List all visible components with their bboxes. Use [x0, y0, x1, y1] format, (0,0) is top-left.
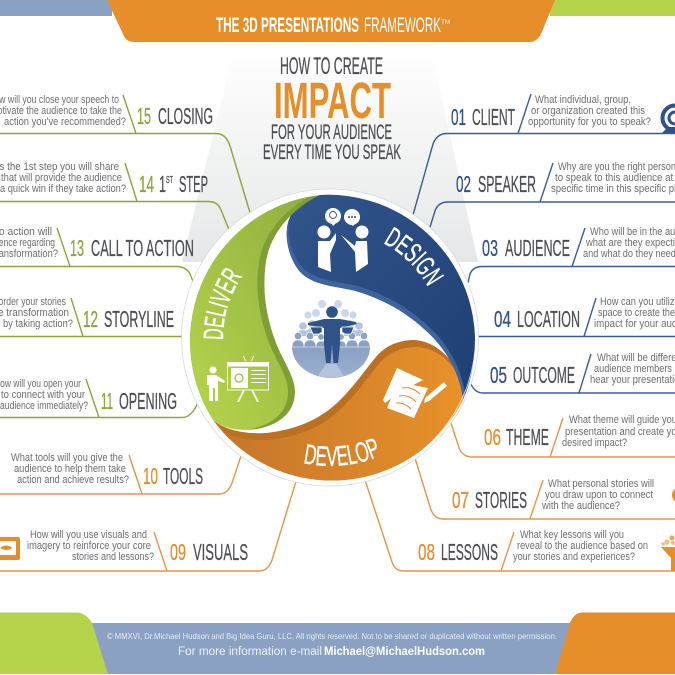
item 09 visuals: stories and lessons? — [72, 551, 154, 563]
item 14 first step: that will provide the audience — [1, 172, 122, 184]
item 01 client: CLIENT — [472, 104, 515, 130]
item 12 storyline: by taking action? — [3, 318, 73, 330]
rim highlight — [184, 192, 476, 483]
item 09 visuals: 09 — [170, 539, 186, 565]
item 10 tools — [0, 452, 242, 494]
icon: stories — [672, 487, 675, 503]
icon: funnel — [661, 535, 675, 571]
segment: develop — [213, 340, 466, 488]
icon: notes and pencil — [383, 368, 447, 418]
item 10 tools: 10 — [143, 463, 158, 489]
top right green band — [550, 0, 675, 16]
header banner — [107, 0, 555, 42]
item 01 client — [413, 94, 675, 215]
contact text: Michael@MichaelHudson.com — [324, 646, 485, 658]
item 12 storyline — [0, 296, 184, 336]
headline: EVERY TIME YOU SPEAK — [263, 140, 401, 164]
item 04 location — [477, 296, 675, 336]
label: deliver: DELIVER — [203, 268, 242, 339]
item 11 opening — [0, 378, 198, 418]
item 08 lessons: LESSONS — [441, 539, 498, 565]
item 13 call to action — [0, 226, 194, 284]
item 05 outcome — [471, 352, 675, 393]
item 03 audience — [468, 226, 675, 283]
item 07 stories — [415, 458, 675, 519]
item 01 client: 01 — [451, 104, 466, 130]
item 06 theme: desired impact? — [562, 437, 627, 449]
icon: presenter at board — [207, 356, 269, 402]
item 10 tools: TOOLS — [163, 463, 203, 489]
copyright text: © MMXVI, Dr.Michael Hudson and Big Idea Guru, LLC. All rights reserved. Not to be shared or duplicated without written permission. — [107, 631, 557, 641]
segment: design — [286, 190, 477, 400]
segment: deliver — [183, 195, 320, 430]
label: design: DESIGN — [384, 226, 444, 286]
item 10 tools: action and achieve results? — [17, 474, 129, 486]
item 08 lessons — [365, 480, 675, 571]
top left blue band — [0, 0, 112, 16]
headline — [263, 53, 401, 164]
item 02 speaker: 02 — [456, 171, 471, 197]
item 12 storyline: STORYLINE — [104, 306, 174, 332]
item 01 client: opportunity for you to speak? — [528, 116, 651, 128]
item 01 client: What individual, group, — [535, 94, 631, 106]
item 02 speaker: SPEAKER — [478, 171, 536, 197]
item 10 tools: What tools will you give the — [11, 452, 123, 464]
item 11 opening: 11 — [101, 388, 113, 414]
three part wheel — [181, 188, 479, 486]
banner title: FRAMEWORK — [364, 14, 441, 37]
footer green block — [0, 612, 108, 674]
item 08 lessons: your stories and experiences? — [513, 551, 635, 563]
banner title: TM — [441, 19, 450, 26]
contact text: For more information e-mail — [178, 646, 322, 658]
item 15 closing: action you've recommended? — [4, 116, 126, 128]
item 15 closing: CLOSING — [158, 103, 213, 129]
item 09 visuals: How will you use visuals and — [30, 529, 147, 541]
item 07 stories: STORIES — [475, 487, 527, 513]
item 05 outcome: OUTCOME — [513, 362, 575, 388]
item 06 theme — [451, 414, 675, 457]
item 08 lessons: reveal to the audience based on — [517, 540, 648, 552]
item 14 first step: 14 — [139, 171, 154, 197]
headline: IMPACT — [274, 72, 391, 129]
item 07 stories: 07 — [452, 487, 469, 513]
item 09 visuals: imagery to reinforce your core — [27, 540, 151, 552]
item 02 speaker — [430, 161, 675, 227]
item 03 audience: AUDIENCE — [505, 235, 570, 261]
item 12 storyline: 12 — [83, 306, 98, 332]
headline: FOR YOUR AUDIENCE — [271, 120, 392, 144]
item 14 first step: a quick win if they take action? — [0, 183, 126, 195]
item 07 stories: with the audience? — [541, 500, 620, 512]
item 01 client: or organization created this — [531, 105, 645, 117]
icon: visuals screen — [0, 537, 20, 560]
item 08 lessons: 08 — [418, 539, 435, 565]
item 13 call to action: 13 — [70, 235, 84, 261]
item 06 theme: 06 — [484, 424, 501, 450]
item 06 theme: THEME — [506, 424, 549, 450]
icon: speaker and audience — [292, 300, 370, 378]
grey spotlight behind headline — [182, 45, 478, 262]
item 11 opening: OPENING — [119, 388, 177, 414]
item 09 visuals — [0, 478, 297, 571]
footer blue band — [88, 623, 574, 674]
item 15 closing: 15 — [137, 103, 151, 129]
item 14 first step — [0, 161, 230, 232]
icon: two speakers with bubbles — [318, 208, 368, 272]
item 11 opening: to connect with your — [1, 389, 85, 401]
item 07 stories: you draw upon to connect — [545, 489, 653, 501]
item 08 lessons: What key lessons will you — [520, 529, 624, 541]
item 09 visuals: VISUALS — [193, 539, 248, 565]
item 14 first step: 1 — [159, 171, 166, 197]
headline: HOW TO CREATE — [280, 53, 383, 80]
item 07 stories: What personal stories will — [548, 478, 654, 490]
item 05 outcome: 05 — [490, 362, 507, 388]
item 14 first step: STEP — [179, 171, 208, 197]
label: develop: DEVELOP — [304, 438, 377, 466]
item 04 location: 04 — [494, 306, 511, 332]
item 13 call to action: CALL TO ACTION — [91, 235, 194, 261]
item 10 tools: audience to help them take — [14, 463, 126, 475]
item 11 opening: audience immediately? — [0, 400, 88, 412]
footer orange block — [555, 612, 675, 674]
footer — [0, 612, 675, 674]
item 15 closing — [0, 94, 251, 216]
item 03 audience: 03 — [482, 235, 498, 261]
banner title: THE 3D PRESENTATIONS — [216, 14, 359, 37]
item 14 first step: ST — [166, 175, 173, 186]
item 04 location: LOCATION — [517, 306, 580, 332]
icon: target — [662, 106, 675, 133]
